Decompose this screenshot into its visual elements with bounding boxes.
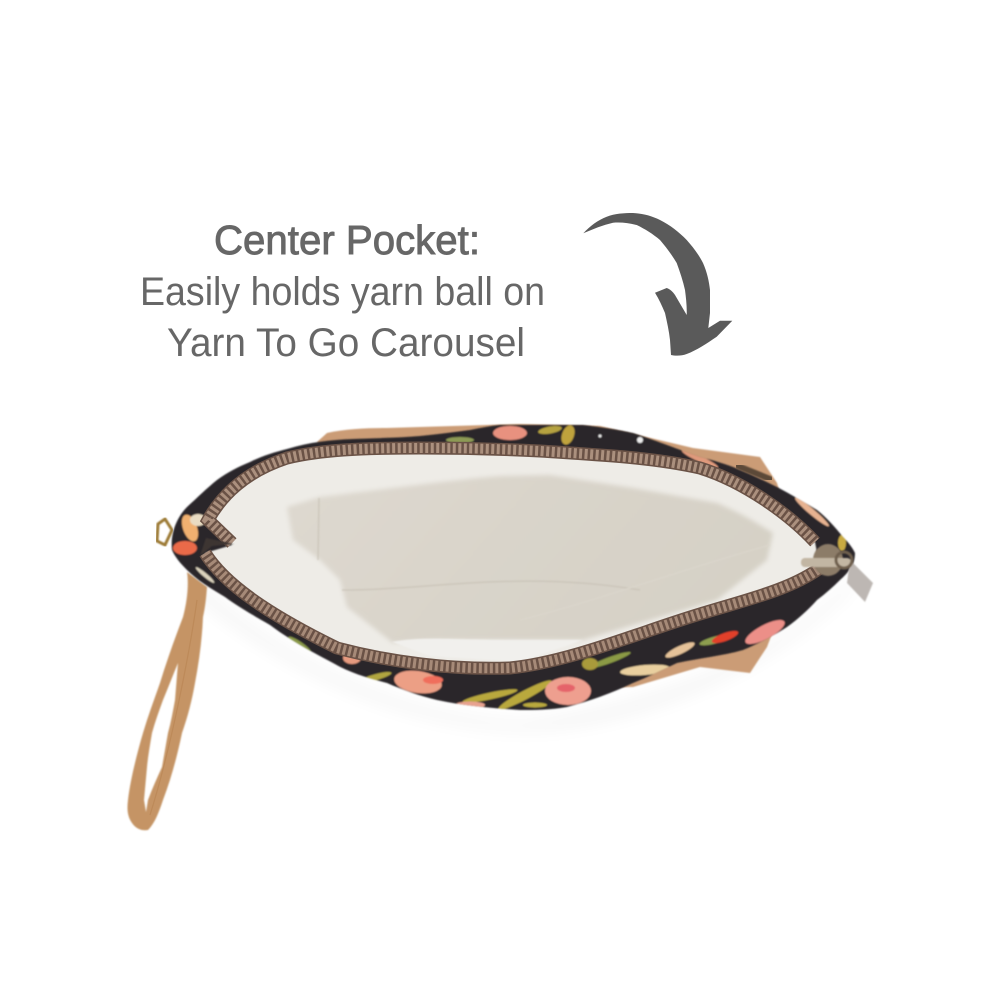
arrow: curved down arrow <box>583 213 732 356</box>
text: line one: Easily holds yarn ball on <box>140 270 545 314</box>
hardware: top ring <box>738 466 770 479</box>
floral pattern <box>173 424 846 713</box>
lining: shaded pocket floor <box>287 475 773 643</box>
lining: fold lines <box>318 498 770 620</box>
soft shadow under pouch <box>190 570 860 730</box>
hardware: left gold ring <box>157 519 172 545</box>
zipper: top teeth <box>208 448 815 543</box>
photo: zip pouch <box>127 420 873 830</box>
text: line two: Yarn To Go Carousel <box>167 321 525 365</box>
zipper end: left dark gap <box>200 538 234 556</box>
fabric: floral print shell <box>160 420 870 720</box>
zipper pull tab <box>847 560 873 602</box>
zipper: bottom teeth <box>205 553 820 668</box>
lining: white interior <box>205 448 820 668</box>
strap stitching highlight <box>150 600 197 815</box>
infographic canvas <box>126 213 874 832</box>
zipper slider <box>801 544 852 576</box>
lining: front fold <box>392 639 583 662</box>
back panel: tan leather <box>317 424 800 690</box>
strap: tan wrist loop <box>127 572 207 830</box>
heading: center pocket: Center Pocket: <box>214 217 480 263</box>
title: callout text <box>140 217 545 365</box>
